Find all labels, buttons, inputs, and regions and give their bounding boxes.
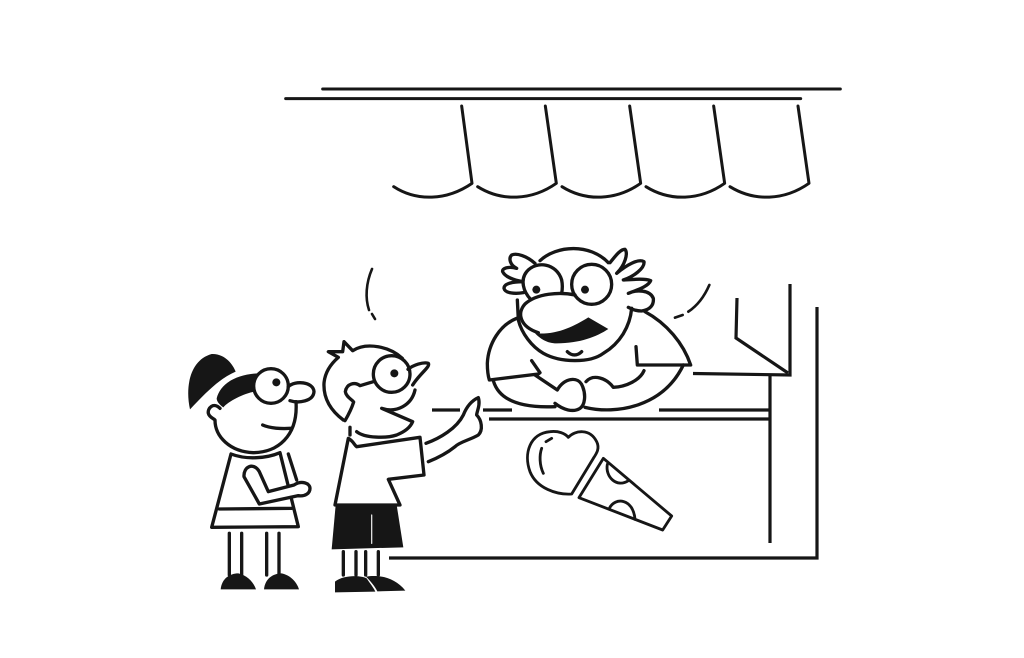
mouth (535, 317, 608, 343)
speech dashes: shopkeeper (675, 285, 709, 318)
eyes (523, 264, 612, 304)
shirt (335, 437, 424, 505)
glasses eye (373, 356, 410, 392)
nose (408, 363, 429, 385)
torso and arms (487, 312, 691, 410)
arm (244, 454, 310, 504)
dress (212, 453, 298, 527)
chin smile (567, 352, 582, 355)
legs (229, 533, 279, 575)
pointing arm (426, 398, 481, 462)
speech dashes: boy (367, 269, 375, 319)
hair fringe (217, 373, 257, 407)
girl (188, 354, 314, 589)
shoes (335, 576, 405, 592)
ice cream cone (527, 431, 672, 530)
shopkeeper (487, 249, 709, 410)
awning (286, 89, 840, 197)
neck (345, 427, 355, 435)
smile (263, 425, 291, 429)
eye (254, 369, 288, 403)
shorts (332, 505, 403, 549)
boy (324, 342, 481, 592)
hair bun (188, 354, 236, 409)
hair and back of head (324, 342, 402, 420)
cone with spots (579, 458, 672, 530)
hair left (503, 254, 535, 293)
scoop (527, 431, 598, 494)
nose (288, 383, 314, 402)
hair right and ear (610, 249, 653, 311)
nose (521, 293, 575, 333)
shoes (221, 573, 299, 589)
legs (343, 552, 378, 575)
scoop highlight (540, 438, 552, 473)
ear and temple (345, 382, 373, 421)
shop counter and stall frame (389, 284, 817, 558)
jaw and mouth (357, 390, 415, 437)
face (208, 402, 296, 453)
head and chin (517, 249, 632, 361)
